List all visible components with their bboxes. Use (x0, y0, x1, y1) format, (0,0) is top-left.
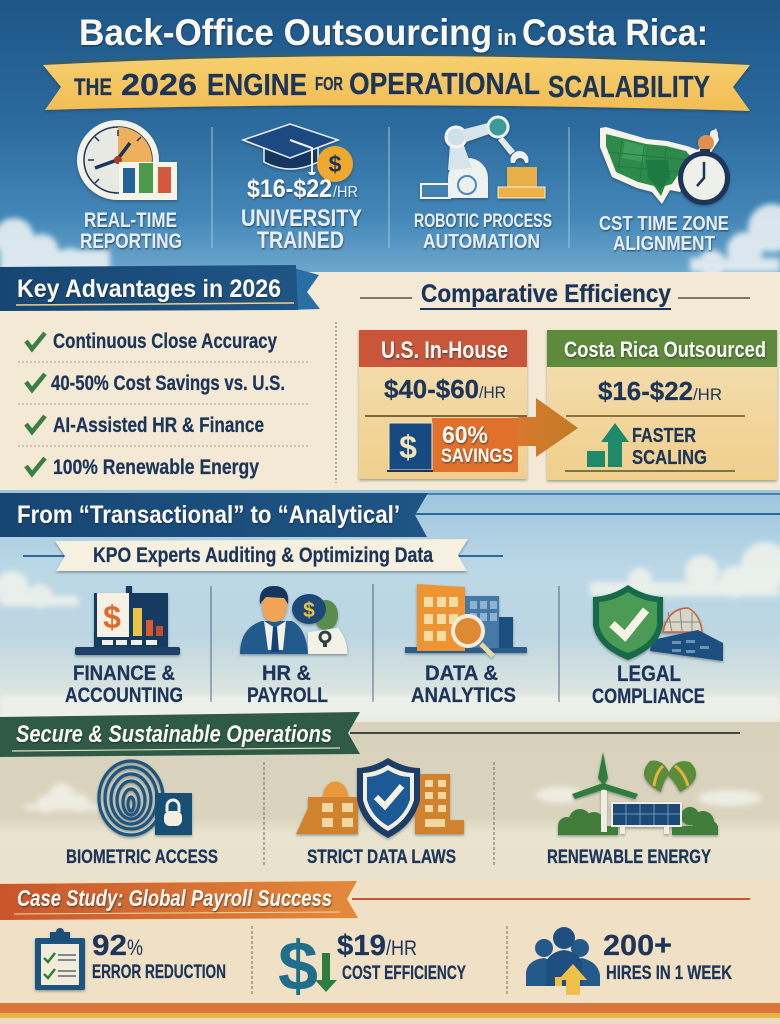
service: finance and accounting (65, 586, 183, 707)
panel: analytical services sky background (0, 490, 780, 722)
icon: shield with buildings (296, 758, 464, 838)
label: cst time zone alignment: ALIGNMENT (613, 233, 715, 255)
title: Back-Office Outsourcing (79, 12, 492, 53)
icon: professional with coin and badge: $ (303, 599, 315, 622)
label: hires in 1 week: HIRES IN 1 WEEK (606, 963, 732, 984)
label: legal compliance: COMPLIANCE (592, 685, 705, 708)
comparison card: Costa Rica outsourced: $16-$22 (598, 376, 693, 406)
value: $19/hr: /HR (386, 937, 417, 960)
heading banner: case study (0, 881, 750, 920)
checklist: key advantages (18, 330, 310, 479)
panel: advantages and comparison background (0, 272, 780, 492)
heading banner: secure and sustainable operations: Secure & Sustainable Operations (16, 721, 332, 748)
label: robotic process automation (414, 211, 552, 253)
icon: wind turbine, solar panel and leaves (558, 752, 718, 835)
label: data and analytics: DATA & (425, 662, 498, 685)
label: faster scaling: SCALING (632, 447, 707, 469)
subtitle ribbon: OPERATIONAL (349, 66, 540, 101)
heading banner: from transactional to analytical (0, 493, 780, 537)
stat: hires in one week (526, 927, 732, 995)
item: renewable energy: 100% Renewable Energy (53, 456, 259, 479)
label: 60% savings (441, 422, 513, 467)
icon: clipboard (35, 928, 85, 990)
top feature dividers (212, 127, 569, 248)
icon: shield with check and solar panel (593, 585, 723, 661)
comparison card: U.S. in-house: /HR (479, 383, 506, 402)
label: robotic process automation: ROBOTIC PROCESS (414, 211, 552, 232)
heading banner: key advantages (0, 265, 320, 311)
feature: strict data laws (296, 758, 464, 868)
panel: secure and sustainable background (0, 722, 780, 882)
value: 92%: 92 (92, 930, 127, 962)
subtitle ribbon: SCALABILITY (548, 69, 710, 104)
stat: error reduction (35, 928, 226, 990)
label: faster scaling: FASTER (632, 425, 696, 447)
heading banner: key advantages: Key Advantages in 2026 (17, 275, 281, 303)
stat: cost efficiency (278, 927, 466, 1005)
label: hr and payroll: HR & (262, 662, 311, 685)
service: hr and payroll (240, 586, 347, 707)
case study dividers (252, 926, 507, 994)
subtitle ribbon: THE (74, 74, 112, 101)
comparison card: U.S. in-house: $40-$60 (384, 374, 479, 404)
heading banner: case study: Case Study: Global Payroll Success (17, 885, 332, 911)
label: faster scaling (632, 425, 707, 469)
title: Costa Rica: (522, 12, 708, 53)
label: hr and payroll: PAYROLL (247, 684, 328, 707)
feature: robotic process automation (414, 117, 552, 253)
label: cst time zone alignment (599, 213, 729, 255)
icon: team with up arrow (526, 927, 600, 995)
subtitle ribbon: FOR (315, 74, 343, 94)
label: robotic process automation: AUTOMATION (423, 231, 540, 253)
item: cost savings: 40-50% Cost Savings vs. U.S. (51, 372, 285, 395)
label: hr and payroll (247, 662, 328, 707)
item: ai-assisted hr and finance: AI-Assisted HR & Finance (53, 414, 264, 437)
subheading ribbon: KPO experts: KPO Experts Auditing & Optimizing Data (93, 544, 433, 567)
icon: dollar box: $ (399, 429, 417, 465)
feature: cst time zone alignment (599, 127, 730, 255)
price label: $16-$22 (247, 175, 332, 203)
comparison card: Costa Rica outsourced: /HR (693, 385, 722, 404)
label: legal compliance (592, 661, 705, 708)
label: error reduction: ERROR REDUCTION (92, 962, 226, 983)
panel: case study background (0, 880, 780, 1024)
subtitle ribbon: ENGINE (207, 67, 307, 102)
heading banner: secure and sustainable operations (0, 712, 740, 757)
subheading ribbon: KPO experts (23, 539, 503, 571)
label: data and analytics (411, 662, 516, 707)
icon: growth arrow (587, 423, 629, 467)
price label: /HR (333, 184, 358, 201)
heading: comparative efficiency: Comparative Efficiency (421, 280, 671, 308)
label: biometric access: BIOMETRIC ACCESS (66, 847, 218, 868)
service: data and analytics (405, 584, 527, 707)
icon: robot arm (421, 117, 545, 198)
value: 92%: % (127, 935, 143, 960)
title (79, 12, 708, 53)
service dividers (211, 584, 559, 702)
icon: US map with stopwatch (600, 127, 730, 205)
label: university trained (241, 205, 362, 254)
subtitle ribbon: 2026 (121, 67, 197, 102)
icon: graduation cap and dollar coin: $ (329, 151, 342, 177)
icon: fingerprint with padlock (99, 761, 192, 835)
label: finance and accounting: ACCOUNTING (65, 684, 183, 707)
heading banner: from transactional to analytical: From “Transactional” to “Analytical’ (17, 501, 400, 529)
feature: renewable energy (547, 752, 718, 868)
icon: dollar with down arrow: $ (278, 927, 318, 1005)
label: renewable energy: RENEWABLE ENERGY (547, 847, 711, 868)
security dividers (264, 762, 494, 867)
label: real-time reporting (80, 209, 182, 253)
icon: finance dashboard: $ (103, 599, 121, 635)
label: legal compliance: LEGAL (617, 661, 681, 686)
label: cost efficiency: COST EFFICIENCY (342, 963, 466, 984)
label: 60% savings: SAVINGS (441, 446, 513, 467)
icon: clock and bar chart (77, 120, 177, 200)
value: $19/hr (337, 930, 417, 962)
feature: real-time reporting (77, 120, 182, 253)
feature: biometric access (66, 761, 218, 868)
label: real-time reporting: REPORTING (80, 230, 182, 253)
label: finance and accounting (65, 662, 183, 707)
bottom stripe (0, 1003, 780, 1024)
value: $19/hr: $19 (337, 930, 386, 962)
comparison card: U.S. in-house: U.S. In-House (381, 337, 508, 364)
background: blue sky panel (0, 0, 780, 278)
label: 60% savings: 60% (442, 422, 488, 449)
value: 92% (92, 930, 143, 962)
label: finance and accounting: FINANCE & (73, 662, 175, 685)
label: strict data laws: STRICT DATA LAWS (307, 847, 456, 868)
comparison card: U.S. in-house (359, 330, 527, 479)
label: real-time reporting: REAL-TIME (84, 209, 177, 232)
icon: dollar with down arrow (278, 927, 337, 1005)
title: in (497, 25, 517, 50)
feature: university trained (241, 124, 362, 254)
savings arrow (387, 398, 578, 472)
label: data and analytics: ANALYTICS (411, 684, 516, 707)
icon: dollar box (387, 423, 433, 471)
label: cst time zone alignment: CST TIME ZONE (599, 213, 729, 235)
item: continuous close accuracy: Continuous Close Accuracy (53, 330, 277, 353)
subtitle ribbon (43, 55, 750, 111)
comparison card: Costa Rica outsourced (547, 330, 777, 480)
icon: buildings with magnifier (405, 584, 527, 656)
service: legal compliance (592, 585, 723, 708)
label: university trained: UNIVERSITY (241, 205, 362, 232)
value: 200+: 200+ (603, 930, 672, 962)
label: university trained: TRAINED (257, 227, 344, 254)
